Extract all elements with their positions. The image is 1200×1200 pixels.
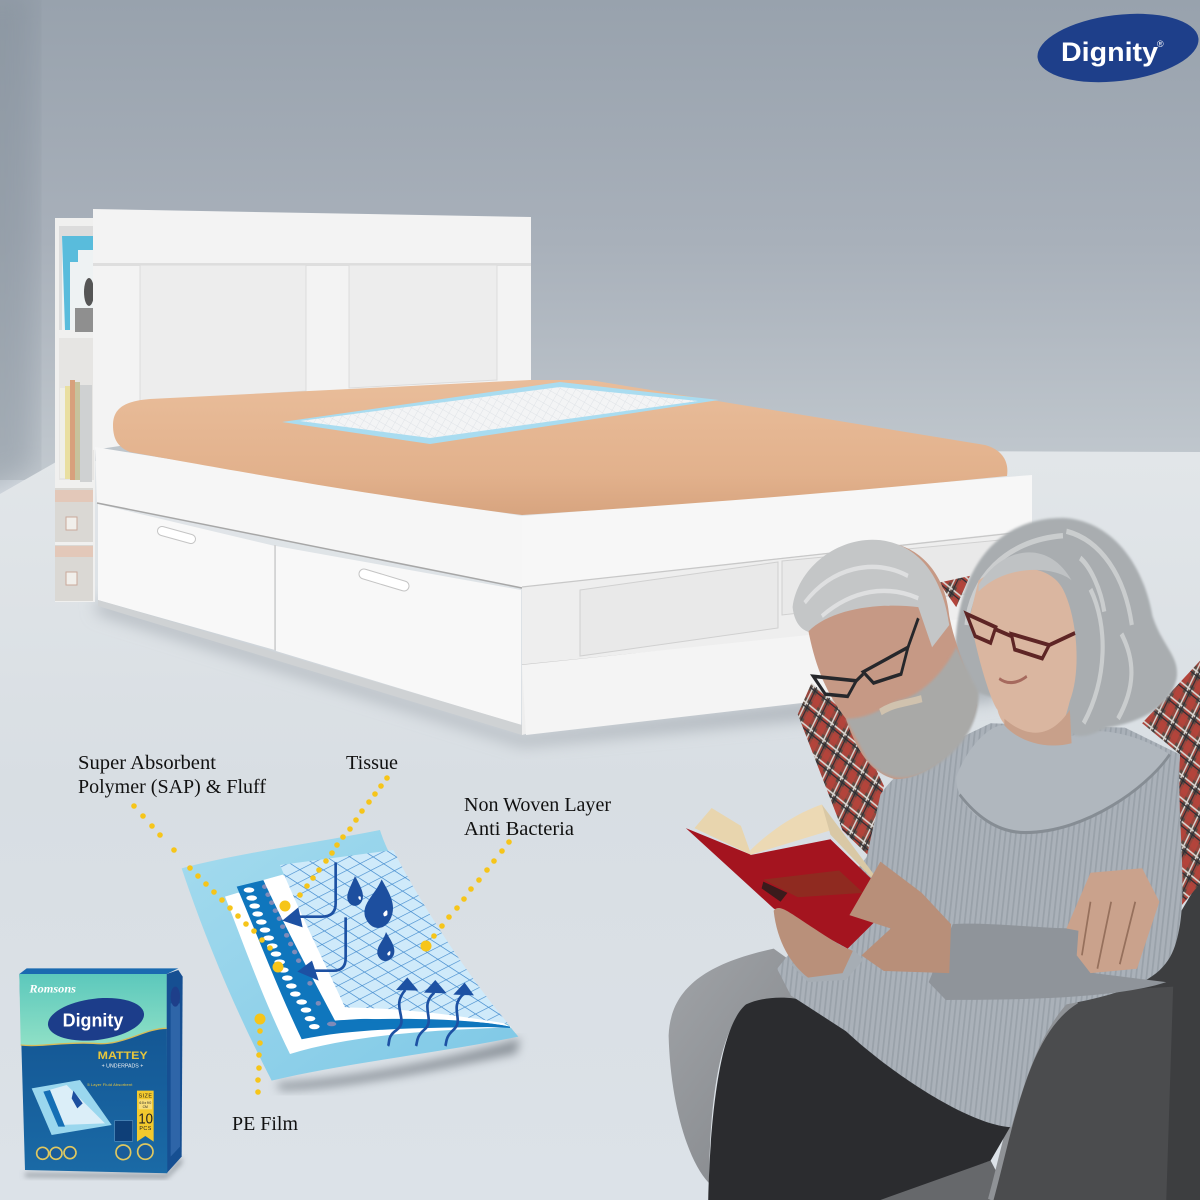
product name: MATTEY — [98, 1050, 148, 1062]
brand logo — [1034, 5, 1200, 91]
PE film leader — [254, 1014, 266, 1095]
tissue layer — [263, 875, 508, 1024]
water drops — [347, 876, 394, 961]
size badge: SIZE — [139, 1093, 152, 1099]
package diagram — [32, 1080, 112, 1135]
label: non woven layer — [464, 794, 611, 840]
couple reading on chair — [669, 518, 1200, 1200]
package shadow — [25, 1157, 182, 1178]
absorbency rating — [115, 1121, 133, 1141]
sweater — [777, 723, 1182, 1127]
package top — [19, 968, 178, 974]
size badge — [137, 1091, 154, 1142]
product package: + UNDERPADS + — [102, 1063, 144, 1069]
bed shadow — [97, 600, 1000, 745]
hands — [774, 862, 1159, 978]
woman — [956, 518, 1177, 746]
size badge: CM — [143, 1105, 148, 1109]
size badge: 60x90 — [139, 1101, 151, 1105]
bed — [55, 209, 1032, 745]
bed frame end panel — [522, 475, 1032, 735]
core perforations — [244, 887, 320, 1029]
drawer handle — [162, 531, 191, 539]
size badge: 10 — [138, 1111, 153, 1127]
tissue leader — [280, 775, 390, 912]
man — [793, 540, 979, 779]
absorbent core — [237, 880, 510, 1039]
brand logo: Dignity — [1061, 37, 1158, 67]
headboard — [93, 209, 531, 450]
size badge: PCS — [139, 1126, 152, 1132]
product package — [19, 968, 183, 1178]
breathability arrows — [388, 990, 463, 1046]
book — [686, 804, 895, 949]
pad shadow — [277, 1038, 520, 1090]
label: SAP and fluff: Polymer (SAP) & Fluff — [78, 776, 266, 798]
woman glasses — [967, 614, 1075, 658]
man glasses — [813, 618, 918, 696]
callout dotted leaders — [131, 775, 512, 1095]
bed frame side and drawers — [95, 447, 522, 735]
non-woven mesh layer — [280, 850, 508, 1024]
label: non woven layer: Anti Bacteria — [464, 818, 574, 840]
label: SAP and fluff: Super Absorbent — [78, 752, 216, 774]
armchair — [669, 879, 1200, 1200]
mattress — [113, 380, 1007, 515]
package logo: Dignity — [63, 1010, 124, 1031]
PE film base layer — [182, 830, 518, 1081]
package logo — [46, 993, 146, 1046]
drawer handle — [364, 574, 404, 586]
label: PE film: PE Film — [232, 1113, 298, 1135]
brand logo: ® — [1157, 39, 1164, 49]
product package: 5 Layer Fluid Absorbent — [87, 1082, 133, 1087]
plaid shirt — [798, 576, 1200, 907]
SAP leader — [131, 803, 284, 972]
layer diagram — [182, 830, 520, 1090]
package front lower — [19, 974, 167, 1173]
trousers — [708, 998, 1011, 1200]
underpad on mattress — [282, 382, 719, 444]
white layer — [225, 893, 512, 1054]
feature badges — [37, 1144, 153, 1160]
absorption arrows — [293, 862, 346, 971]
label: non woven layer: Non Woven Layer — [464, 794, 611, 816]
bookshelf with books and boxes — [55, 218, 95, 602]
package front green top — [19, 974, 167, 1046]
brand mark: Romsons — [28, 984, 77, 996]
package side — [167, 970, 183, 1173]
label: SAP and fluff — [78, 752, 266, 798]
non woven leader — [420, 839, 512, 952]
label: tissue: Tissue — [346, 752, 398, 774]
